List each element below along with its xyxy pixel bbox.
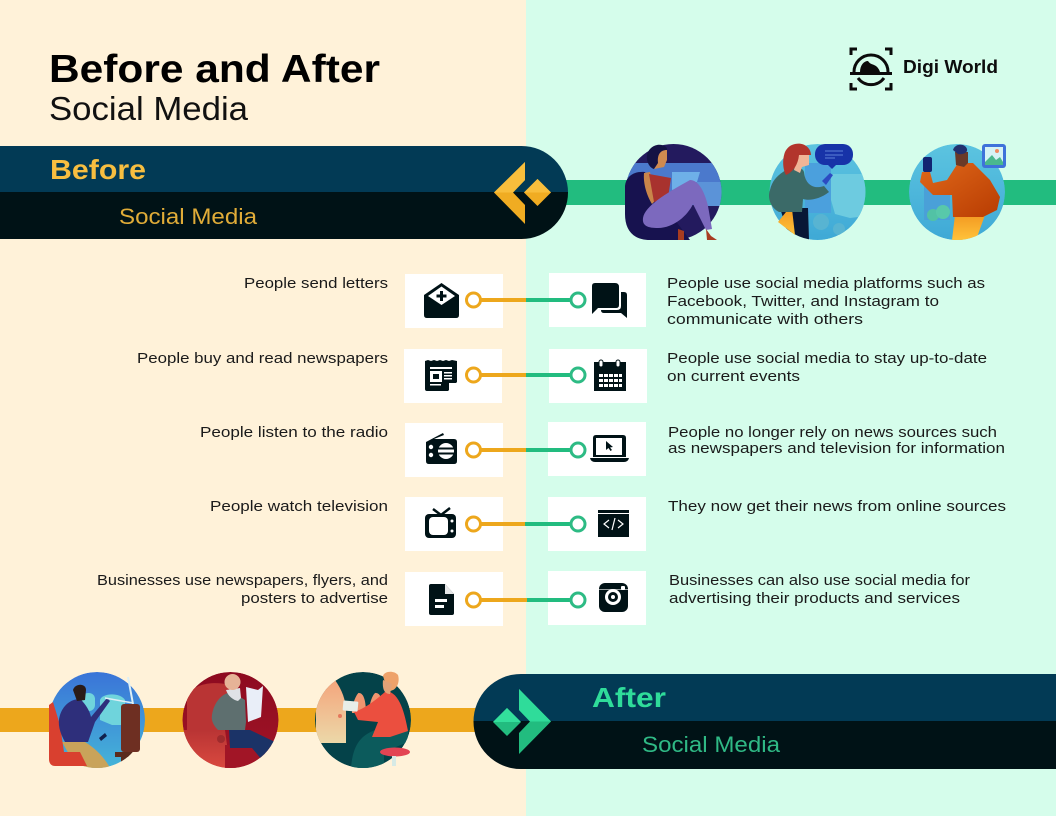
icon: after chevron (493, 689, 551, 754)
icon: television (425, 508, 456, 538)
green bar behind after illustrations (560, 180, 1056, 205)
row 4: television to online news (210, 497, 1006, 551)
after text: information sources: as newspapers and television for information (668, 440, 1005, 457)
after text: social advertising: advertising their products and services (669, 590, 960, 607)
before card: document (405, 572, 503, 626)
after text: social advertising (669, 572, 970, 607)
before text: letters: People send letters (244, 275, 388, 292)
icon: envelope (424, 283, 459, 318)
title: Social Media (49, 90, 249, 127)
before card: letter (405, 274, 503, 328)
connector (466, 593, 585, 607)
after text: current events (667, 350, 987, 385)
illustration: man reading a book (315, 672, 411, 768)
after text: platforms: People use social media platforms such as (667, 275, 985, 292)
logo: Digi World (850, 49, 998, 89)
before text: newspapers: People buy and read newspapers (137, 350, 388, 367)
icon: laptop (590, 435, 629, 462)
after heading: After (592, 682, 666, 713)
icon: before chevron (494, 162, 551, 224)
before card: radio (405, 423, 503, 477)
row 3: radio to online information (200, 422, 1005, 477)
illustration: woman with phone and speech bubble (769, 144, 866, 240)
orange bar behind before illustrations (0, 708, 480, 732)
before text: advertising: Businesses use newspapers, flyers, and (97, 572, 388, 589)
before text: advertising: posters to advertise (241, 590, 388, 607)
after text: platforms: Facebook, Twitter, and Instagram to (667, 293, 939, 310)
after text: current events: on current events (667, 368, 800, 385)
connector (466, 368, 585, 382)
before text: advertising (97, 572, 388, 607)
row 5: print advertising to social advertising (97, 571, 970, 626)
after card: chat (549, 273, 646, 327)
illustration: man watching television (49, 672, 145, 768)
after text: social advertising: Businesses can also use social media for (669, 572, 970, 589)
right background panel (526, 0, 1056, 816)
illustration: man taking a selfie (909, 144, 1006, 240)
after text: information sources: People no longer rely on news sources such (668, 424, 997, 441)
before text: television: People watch television (210, 498, 388, 515)
icon: chat bubbles (592, 283, 627, 318)
after text: current events: People use social media to stay up-to-date (667, 350, 987, 367)
after subheading: Social Media (642, 732, 781, 757)
before heading: Before (50, 154, 146, 185)
banner: After (473, 674, 1056, 769)
left background panel (0, 0, 526, 816)
row 1: letters to social platforms (244, 273, 985, 328)
before subheading: Social Media (119, 204, 258, 229)
icon: code window (598, 510, 629, 537)
icon: radio (426, 433, 457, 464)
connector (466, 293, 585, 307)
after text: online news: They now get their news from online sources (668, 498, 1006, 515)
after text: platforms: communicate with others (667, 311, 863, 328)
icon: calendar (594, 360, 626, 391)
illustration: old man reading newspaper (182, 672, 285, 768)
before text: radio: People listen to the radio (200, 424, 388, 441)
after card: calendar (549, 349, 647, 403)
row 2: newspapers to current events (137, 349, 987, 403)
connector (466, 443, 585, 457)
icon: camera (599, 583, 628, 612)
title: Before and After (49, 48, 380, 91)
title (49, 48, 380, 127)
after card: camera (548, 571, 646, 625)
before card: television (405, 497, 503, 551)
before card: newspaper (404, 349, 502, 403)
logo: Digi World: Digi World (903, 57, 998, 77)
icon: newspaper (425, 360, 457, 391)
after card: code window (548, 497, 646, 551)
connector (466, 517, 585, 531)
after text: platforms (667, 275, 985, 328)
illustration: woman on beanbag with laptop (625, 144, 723, 241)
after card: laptop (548, 422, 646, 476)
after text: information sources (668, 424, 1005, 457)
banner: Before (0, 146, 568, 239)
icon: document (429, 584, 454, 615)
